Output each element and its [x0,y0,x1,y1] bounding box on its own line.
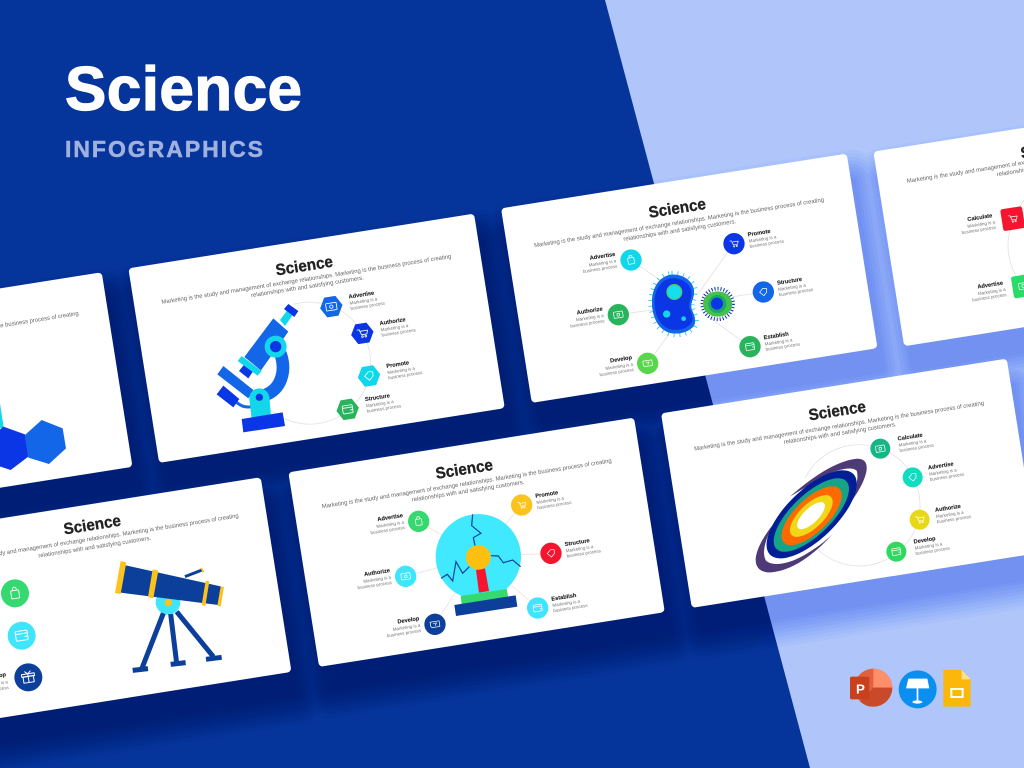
illustration: galaxy [753,456,871,572]
item: authorize: Marketing is a [576,313,604,322]
panel: telescope slide [0,477,292,727]
item: structure: Marketing is a [778,283,807,292]
item: structure: Marketing is a [366,399,394,408]
app icons [850,669,971,708]
description text line 2: relationships with and satisfying customers. [251,275,365,299]
item: establish: business process [553,603,589,613]
item: authorize: Authorize [935,504,961,514]
item: bag [0,577,31,609]
item: advertise: business process [929,471,965,482]
item: develop: Develop [610,355,633,364]
item: authorize [908,502,973,531]
item: promote: business process [388,370,424,380]
item: develop: Marketing is a [914,541,943,551]
item: promote: business process [749,238,785,249]
panel: bacteria slide [501,154,878,403]
panel: plasma ball slide [288,418,665,667]
item: structure [751,274,815,304]
slide heading: Science [62,513,122,538]
item: advertise: Advertise [977,281,1003,290]
item: advertise: Advertise [589,252,616,262]
icon: Google Slides [943,670,971,707]
item: develop: Marketing is a [392,623,421,632]
item: advertise: Marketing is a [588,258,617,268]
item: wallet [6,620,38,652]
item: advertise: Advertise [377,513,403,523]
item: advertise [581,248,643,278]
item: structure [539,535,602,566]
slide heading: Science [274,254,334,279]
orbit arc [253,302,371,424]
item: authorize [350,315,417,345]
illustration: plasma ball [436,514,521,616]
title: Science [65,55,302,124]
item: advertise: Marketing is a [978,287,1007,296]
connector lines [618,244,763,363]
item: establish: Marketing is a [552,599,581,608]
item: advertise: Marketing is a [349,296,378,306]
background: light blue diagonal panel [605,0,1024,768]
item: promote: Promote [747,229,771,238]
item: advertise [970,273,1024,305]
description text: Marketing is the study and management of exchange relationships. Marketing is the business process of creating [322,458,612,510]
item: promote: Marketing is a [387,366,416,375]
item: structure: business process [779,287,814,297]
description text line 2: relationships with and satisfying customers. [623,219,737,243]
item: authorize: business process [570,318,606,329]
item: structure: business process [366,403,402,414]
item: calculate: Marketing is a [898,438,927,448]
item: calculate [869,430,935,460]
item: advertise: business process [582,263,618,274]
item: calculate [959,206,1024,238]
item: promote: Promote [386,360,410,370]
item: authorize [355,564,418,595]
illustration: bacteria [652,275,733,334]
item: structure: Structure [777,277,803,287]
item: establish: Establish [551,593,577,603]
item: develop [385,612,447,643]
slide heading: Science [647,196,707,222]
icon: Keynote [899,670,937,708]
item: develop: Marketing is a [605,362,634,371]
item: authorize: Marketing is a [936,510,965,519]
connector lines [406,505,551,624]
item: develop: Develop [913,536,937,545]
item: advertise: Advertise [928,461,954,471]
illustration: microscope [217,304,298,432]
panel: hexagon slide [0,272,133,522]
item: structure: Structure [564,538,590,548]
item: develop [0,661,44,700]
item: develop: business process [915,546,951,556]
item: promote [356,358,424,388]
item: promote: Marketing is a [748,234,777,244]
item: advertise [368,509,431,540]
item: promote [722,225,785,256]
item: promote [509,487,573,517]
item: authorize: Authorize [379,317,406,327]
item: authorize: Authorize [364,568,390,578]
subtitle: INFOGRAPHICS [65,136,263,162]
item: advertise: business process [972,292,1008,302]
item: advertise: Advertise [348,290,375,300]
description text: Marketing is the study and management of exchange relationships. Marketing is the business process of creating [534,197,825,249]
item: develop [597,351,660,382]
item: promote: Marketing is a [536,496,565,505]
card shadows on dark background [0,210,776,768]
orbit arc [805,445,920,566]
card shadows on light background [705,153,1024,644]
item: promote: Promote [535,490,559,500]
item: advertise: Marketing is a [929,467,958,477]
description text line 2: relationships with and satisfying customers. [411,480,525,504]
item: establish [738,328,801,359]
item: advertise: business process [350,301,386,311]
description text: Marketing is the study and management of exchange relationships. Marketing is the business process of creating [161,254,452,306]
item: structure: business process [566,548,602,559]
hexagon molecule [0,403,66,470]
item: authorize: business process [381,327,417,338]
item: structure: Marketing is a [565,544,594,553]
item: authorize: business process [357,580,393,590]
illustration: telescope [115,561,224,670]
item: establish: Marketing is a [764,337,793,347]
panel: galaxy slide [661,359,1024,608]
item: authorize: Marketing is a [363,575,392,584]
item: advertise: business process [370,525,406,535]
description text: Marketing is the study and management of exchange relationships. Marketing is the business process of creating [694,401,985,453]
orbit arc [1008,200,1024,276]
item: calculate: Calculate [967,213,993,223]
item: authorize: Authorize [576,306,603,316]
item: structure: Structure [365,393,390,403]
item: establish [525,590,589,620]
item: authorize: business process [936,514,972,524]
item: advertise [319,288,386,318]
item: calculate: Marketing is a [967,219,996,229]
item: develop: Develop [397,616,420,625]
slide heading: Science [434,457,494,483]
description text line 2: relationships with and satisfying customers. [783,422,897,446]
slide heading: Science [807,399,867,424]
item: calculate: business process [899,443,935,453]
item: promote: business process [537,500,573,510]
item: establish: Establish [763,331,790,341]
item: authorize: Marketing is a [380,323,409,332]
item: establish: business process [765,341,801,352]
item: develop [885,533,951,563]
item: develop: business process [386,628,422,638]
item: authorize [568,302,631,333]
item: structure [335,391,403,421]
item: advertise [901,459,966,489]
item: develop: business process [599,367,635,377]
item: advertise: Marketing is a [376,520,405,529]
icon: PowerPoint: P [856,681,865,696]
description text line 2: relationships with and satisfying customers. [38,536,152,560]
panel: microscope slide [128,214,505,463]
item: calculate: Calculate [897,433,923,442]
panel: right cropped slide [873,97,1024,346]
item: calculate: business process [961,225,997,235]
